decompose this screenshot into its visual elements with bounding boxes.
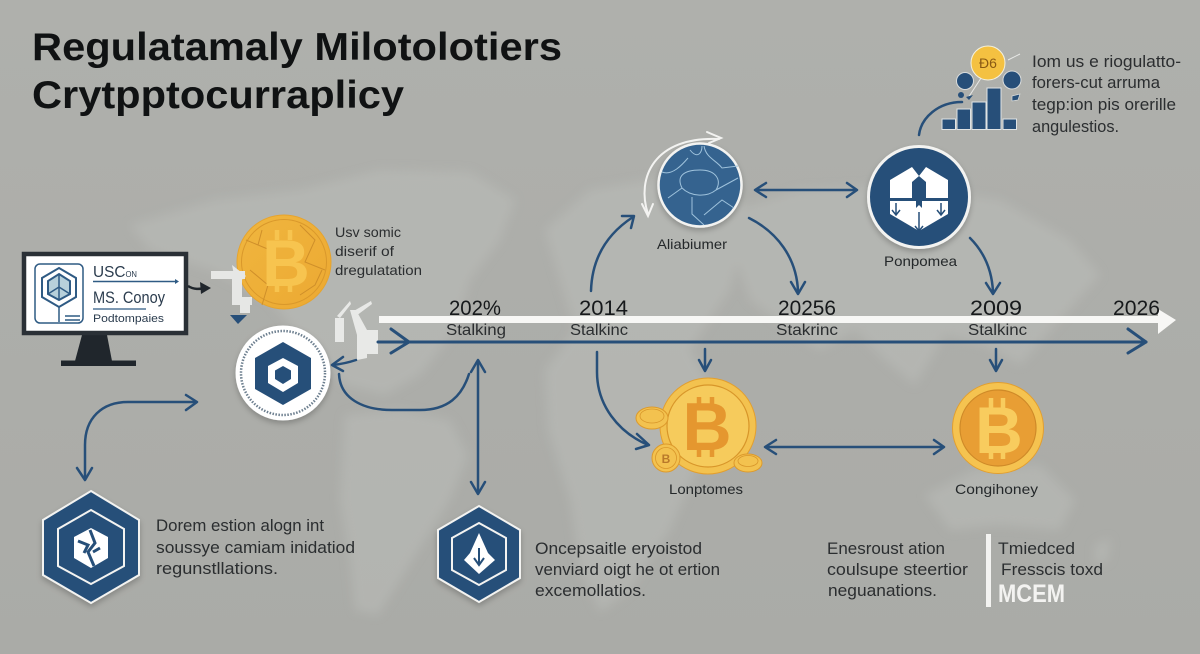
coin cluster: B	[662, 452, 671, 466]
timeline labels	[446, 297, 1160, 339]
label: Congihoney: Congihoney	[955, 481, 1038, 497]
text: coin note: Usv somic	[335, 224, 401, 240]
text: chart note	[1032, 52, 1181, 136]
text: coin note	[335, 224, 422, 278]
timeline labels: Stalkinc	[570, 322, 628, 339]
title: Regulatamaly Milotolotiers	[32, 26, 562, 69]
timeline labels: 2026	[1113, 297, 1160, 320]
text: chart note: Iom us e riogulatto-	[1032, 52, 1181, 71]
icon: bar chart with coin: Ɖ6	[979, 55, 997, 71]
text: middle note: venviard oigt he ot ertion	[535, 560, 720, 579]
text: right note: neguanations.	[828, 581, 937, 600]
text: left note: regunstllations.	[156, 559, 278, 578]
white connector near coin	[211, 265, 252, 313]
timeline: navy arrow	[378, 329, 1146, 353]
callout: MCEM: MCEM	[998, 580, 1065, 608]
coin: bitcoin orange	[952, 382, 1044, 474]
text: right note	[827, 539, 968, 600]
arrow: globe to badge	[755, 183, 857, 197]
icon: monitor: USCON	[93, 264, 137, 281]
timeline labels: Stakrinc	[776, 322, 838, 339]
arrow badge	[868, 146, 970, 248]
coin: bitcoin map	[237, 215, 331, 309]
arrow: hub curve to timeline	[339, 374, 469, 410]
text: right note: coulsupe steertior	[827, 560, 968, 579]
label: Lonptomes: Lonptomes	[669, 481, 743, 497]
white arc around globe	[642, 132, 721, 216]
title	[32, 26, 562, 117]
text: chart note: angulestios.	[1032, 117, 1119, 136]
arrow: vertical double	[471, 360, 485, 494]
icon: monitor	[24, 254, 186, 366]
text: middle note: Oncepsaitle eryoistod	[535, 539, 702, 558]
text: left note: soussye camiam inidatiod	[156, 538, 355, 557]
text: middle note: excemollatios.	[535, 581, 646, 600]
timeline labels: 20256	[778, 297, 836, 320]
text: left note: Dorem estion alogn int	[156, 516, 324, 535]
title: Crytpptocurraplicy	[32, 74, 404, 117]
coin cluster	[636, 378, 762, 474]
hub badge	[236, 326, 330, 420]
coin cluster: B	[682, 389, 732, 465]
text: right note: Enesroust ation	[827, 539, 945, 558]
label: Ponpomea: Ponpomea	[884, 253, 957, 269]
callout: MCEM: Tmiedced	[998, 539, 1075, 558]
globe badge	[658, 144, 742, 226]
coin: bitcoin orange: B	[975, 393, 1023, 467]
icon: monitor: Podtompaies	[93, 313, 165, 325]
callout: MCEM	[986, 534, 1103, 608]
timeline: white arrow	[379, 309, 1176, 334]
timeline labels: Stalking	[446, 322, 506, 339]
arrow: monitor to coin	[188, 282, 211, 294]
text: middle note	[535, 539, 720, 600]
white glitch connector	[335, 301, 378, 360]
arrow: timeline to coin cluster	[699, 349, 711, 371]
arrow: globe to timeline	[749, 218, 805, 294]
label: Alibiumer: Aliabiumer	[657, 236, 727, 252]
arrow: timeline to coin	[990, 349, 1002, 371]
arrow: to globe	[591, 216, 634, 291]
timeline labels: 202%	[449, 297, 501, 320]
timeline labels: 2009	[970, 297, 1022, 320]
text: left note	[156, 516, 355, 578]
text: coin note: diserif of	[335, 243, 394, 259]
arrow: coin to coin	[765, 440, 944, 454]
world map silhouette	[130, 170, 1110, 615]
arrow: to hub	[332, 357, 356, 371]
callout: MCEM: Fresscis toxd	[1001, 560, 1103, 579]
text: chart note: tegp:ion pis orerille	[1032, 95, 1176, 114]
arrow: down to hub	[230, 315, 247, 324]
text: coin note: dregulatation	[335, 262, 422, 278]
icon: bar chart with coin	[942, 46, 1021, 130]
arrow: lower left curve	[77, 395, 197, 480]
timeline labels: 2014	[579, 297, 628, 320]
timeline labels: Stalkinc	[968, 322, 1027, 339]
hexagon icon: left	[43, 491, 139, 603]
arrow: badge to chart	[919, 102, 962, 135]
text: chart note: forers-cut arruma	[1032, 73, 1161, 92]
arrow: badge to timeline	[970, 238, 1000, 294]
hexagon icon: middle	[438, 506, 520, 602]
coin: bitcoin map: B	[262, 226, 310, 300]
icon: monitor: MS. Conoy	[93, 288, 165, 307]
arrow: 2014 to coin cluster	[597, 352, 649, 449]
